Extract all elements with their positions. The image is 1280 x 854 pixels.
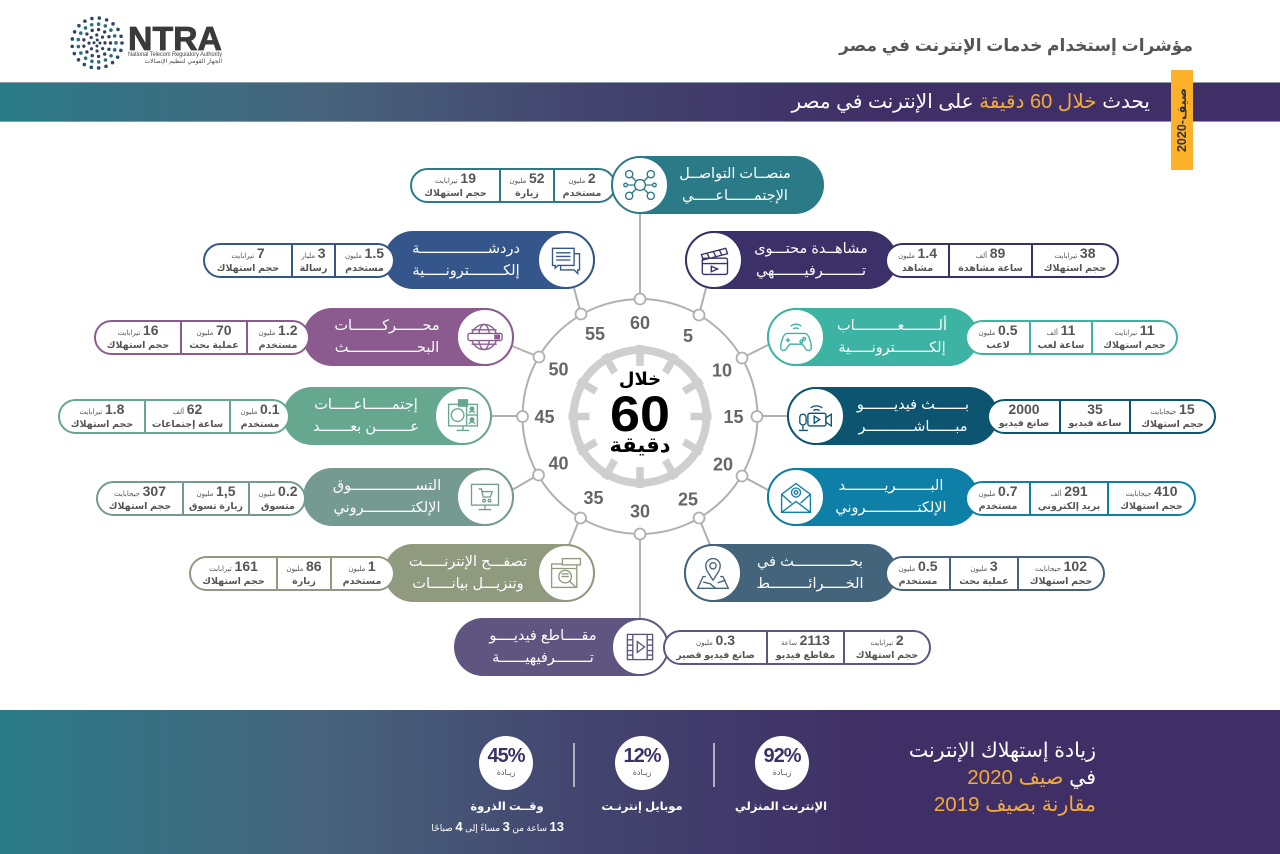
clock diagram: 30 xyxy=(630,502,650,522)
stats: ساعة مشاهدة xyxy=(958,263,1023,274)
stats: حجم استهلاك xyxy=(1030,576,1092,587)
stats: 11 تيرابايت xyxy=(1114,322,1155,338)
stats: زيارة xyxy=(515,188,539,199)
pill title xyxy=(754,241,868,279)
stats: 62 ألف xyxy=(173,401,202,417)
icon: map pin xyxy=(684,544,742,602)
pill title xyxy=(334,318,440,356)
clock diagram: 40 xyxy=(548,454,569,474)
clock diagram: 15 xyxy=(723,407,744,427)
pill title: البــــــــريـــــــــد xyxy=(839,478,943,494)
stats: 307 جيجابايت xyxy=(114,483,166,499)
stats xyxy=(965,320,1178,355)
clock diagram: 60 xyxy=(610,386,670,442)
logo: NTRA: الجهاز القومي لتنظيم الإتصالات xyxy=(145,58,222,65)
stats: زيارة تسوق xyxy=(189,501,243,512)
stats: 1 مليون xyxy=(348,558,376,574)
icon: clapperboard xyxy=(685,231,743,289)
stats xyxy=(94,320,310,355)
stats: 161 تيرابايت xyxy=(209,558,258,574)
pill title: مشاهــدة محتـــوى xyxy=(754,241,868,257)
stats: زيارة xyxy=(292,576,316,587)
stats: 2 تيرابايت xyxy=(870,632,904,648)
pill title: منصــات التواصــل xyxy=(679,166,791,182)
pill title: تصفـــح الإنترنـــــت xyxy=(409,554,527,570)
stat circle: peak time: زيـادة xyxy=(497,768,515,777)
stats: مشاهد xyxy=(902,263,933,274)
icon: game controller xyxy=(767,308,825,366)
panel: entertainment content xyxy=(685,231,1119,289)
stats: لاعب xyxy=(986,340,1010,351)
stats: حجم استهلاك xyxy=(217,263,279,274)
stats: 1.4 مليون xyxy=(898,245,937,261)
pill title: إجتمــــــاعـــــات xyxy=(314,397,418,413)
pill title: تــــــــرفيهيــــــة xyxy=(492,650,594,666)
stats xyxy=(96,481,306,516)
clock diagram: 60 xyxy=(630,313,650,333)
panel: e-commerce xyxy=(96,468,514,526)
stats: 19 تيرابايت xyxy=(435,170,476,186)
pill title: مقــــاطع فيديــــو xyxy=(489,628,597,644)
panel: email xyxy=(767,468,1196,526)
stats xyxy=(189,556,395,591)
pill title: بحـــــــــــــث في xyxy=(757,554,863,570)
pill title xyxy=(412,241,520,279)
icon: globe search xyxy=(456,308,514,366)
stats: حجم استهلاك xyxy=(1120,501,1183,512)
stats xyxy=(663,630,931,665)
stats: 38 تيرابايت xyxy=(1054,245,1096,261)
stats: مستخدم xyxy=(343,576,381,587)
season tag xyxy=(1171,70,1193,170)
icon: envelope xyxy=(767,468,825,526)
icon: network xyxy=(611,156,669,214)
stats xyxy=(203,243,395,278)
stats: حجم استهلاك xyxy=(202,576,265,587)
pill title xyxy=(856,397,969,435)
stat circle: mobile internet xyxy=(615,736,669,790)
panel: browsing and downloads xyxy=(189,544,595,602)
panel: search engines xyxy=(94,308,514,366)
clock diagram: خلال xyxy=(619,369,661,390)
stats: عملية بحث xyxy=(959,576,1009,587)
stats: متسوق xyxy=(261,501,295,512)
stats xyxy=(885,556,1105,591)
pill title: الإلكتـــــــــــروني xyxy=(334,500,440,516)
icon: chat bubbles xyxy=(537,231,595,289)
pill title xyxy=(313,397,419,435)
stat circle: home internet xyxy=(755,736,809,790)
label: peak time: وقــت الذروة xyxy=(470,801,544,813)
stats: حجم استهلاك xyxy=(1044,263,1106,274)
footer heading: زيادة إستهلاك الإنترنت xyxy=(909,739,1096,762)
stats: حجم استهلاك xyxy=(107,340,169,351)
stats: مستخدم xyxy=(899,576,937,587)
header band xyxy=(0,82,1280,122)
stats: 86 مليون xyxy=(286,558,322,574)
footer band xyxy=(0,710,1280,854)
stats: مستخدم xyxy=(241,419,279,430)
stats: ساعة لعب xyxy=(1038,340,1084,351)
clock diagram: 20 xyxy=(713,454,733,474)
panel: remote meetings xyxy=(58,387,492,445)
stats: حجم استهلاك xyxy=(424,188,487,199)
pill title: التســـــــــــــــوق xyxy=(333,478,441,494)
label: home internet: الإنترنت المنزلي xyxy=(735,801,827,813)
footer heading: في صيف 2020 xyxy=(967,766,1096,789)
pill title: الخـــــرائـــــــــط xyxy=(756,576,864,592)
stats: 3 مليون xyxy=(970,558,998,574)
pill title: دردشــــــــــــــــة xyxy=(412,241,520,257)
pill title xyxy=(679,166,791,204)
stats: ساعة إجتماعات xyxy=(152,419,223,430)
stats xyxy=(885,243,1119,278)
stat circle: peak time xyxy=(479,736,533,790)
icon: browser search xyxy=(537,544,595,602)
pill title: البحــــــــــــــــث xyxy=(335,340,439,356)
stats: عملية بحث xyxy=(189,340,239,351)
stats: مقاطع فيديو xyxy=(776,650,835,661)
stats: حجم استهلاك xyxy=(109,501,171,512)
stats xyxy=(410,168,616,203)
stats: 1.2 مليون xyxy=(258,322,298,338)
stats: 0.5 مليون xyxy=(898,558,938,574)
logo: NTRA xyxy=(70,16,222,70)
pill title xyxy=(837,316,947,356)
stats: 0.7 مليون xyxy=(978,483,1018,499)
pill title: الإجتمــــــاعـــــي xyxy=(682,188,788,204)
panel: live streaming xyxy=(787,387,1216,445)
stats: 35 xyxy=(1087,401,1103,417)
stats xyxy=(965,481,1196,516)
stat circle: home internet: 92% xyxy=(763,745,801,767)
clock diagram: 5 xyxy=(683,326,693,346)
stats: صانع فيديو قصير xyxy=(676,650,755,661)
pill title: عــــــــن بعـــــــد xyxy=(313,419,419,435)
stats: رسالة xyxy=(300,263,327,274)
stats: 0.1 مليون xyxy=(240,401,280,417)
icon: shopping screen xyxy=(456,468,514,526)
peak time note: 13 ساعة من 3 مساءً إلى 4 صباحًا xyxy=(431,819,564,834)
stat circle: mobile internet: 12% xyxy=(623,745,661,767)
pill title xyxy=(756,554,864,592)
stats: مستخدم xyxy=(979,501,1017,512)
title: مؤشرات إستخدام خدمات الإنترنت في مصر xyxy=(839,36,1193,55)
stat circle: home internet: زيـادة xyxy=(773,768,791,777)
panel: social platforms xyxy=(410,156,824,214)
stats: مستخدم xyxy=(563,188,601,199)
stats: 0.2 مليون xyxy=(258,483,298,499)
clock diagram: 45 xyxy=(534,407,555,427)
divider xyxy=(573,743,574,787)
stats: 70 مليون xyxy=(196,322,232,338)
stats: مستخدم xyxy=(345,263,384,274)
stat circle: peak time: 45% xyxy=(487,745,525,767)
panel: games xyxy=(767,308,1178,366)
clock diagram: 50 xyxy=(548,360,569,380)
stats: 291 ألف xyxy=(1050,483,1088,499)
stats: 1.8 تيرابايت xyxy=(80,401,124,417)
label: mobile internet: موبايل إنترنـت xyxy=(601,801,683,813)
icon: live camera xyxy=(787,387,845,445)
clock diagram: 35 xyxy=(583,488,604,508)
pill title xyxy=(333,478,441,516)
pill title: مبــــــاشـــــــــــر xyxy=(859,419,967,435)
logo: NTRA: NTRA xyxy=(128,20,222,57)
band heading: يحدث خلال 60 دقيقة على الإنترنت في مصر xyxy=(792,91,1150,113)
stats: 89 ألف xyxy=(976,245,1005,261)
pill title: إلكــــــــترونـــــية xyxy=(412,263,520,279)
stats: 410 جيجابايت xyxy=(1126,483,1178,499)
stats: حجم استهلاك xyxy=(1103,340,1166,351)
stats: 0.5 مليون xyxy=(978,322,1018,338)
stats: 52 مليون xyxy=(509,170,545,186)
stats xyxy=(58,399,290,434)
stats: حجم استهلاك xyxy=(71,419,133,430)
stats: 2 مليون xyxy=(568,170,596,186)
pill title xyxy=(835,478,947,516)
icon: film clip xyxy=(611,618,669,676)
stats: 15 جيجابايت xyxy=(1150,401,1195,417)
divider xyxy=(713,743,714,787)
stats: 2113 ساعة xyxy=(781,632,830,648)
stats: صانع فيديو xyxy=(999,418,1049,429)
pill title: إلكــــــــترونـــــية xyxy=(838,340,946,356)
stats: 7 تيرابايت xyxy=(231,245,265,261)
stats: 1,5 مليون xyxy=(196,483,236,499)
stats xyxy=(987,399,1216,434)
pill title xyxy=(488,628,597,666)
stats: ساعة فيديو xyxy=(1069,418,1121,429)
clock diagram: دقيقة xyxy=(610,433,671,457)
stats: 1.5 مليون xyxy=(345,245,384,261)
pill title: محــــــركـــــــات xyxy=(334,318,440,334)
pill title: ألــــــــعــــــــــاب xyxy=(837,318,947,334)
stats: مستخدم xyxy=(259,340,297,351)
panel: short video clips xyxy=(454,618,931,676)
stats: بريد إلكتروني xyxy=(1038,501,1100,512)
pill title: وتنزيـــل بيانـــــات xyxy=(412,576,524,592)
pill title xyxy=(409,554,527,592)
season tag text: صيف-2020 xyxy=(1175,88,1189,152)
stat circle: mobile internet: زيـادة xyxy=(633,768,651,777)
footer heading xyxy=(909,739,1096,816)
clock diagram: 25 xyxy=(678,490,698,510)
stats: حجم استهلاك xyxy=(1141,419,1204,430)
pill title: بـــــــث فيديـــــــو xyxy=(857,397,969,413)
stats: 16 تيرابايت xyxy=(118,322,158,338)
footer heading: مقارنة بصيف 2019 xyxy=(934,793,1096,816)
pill title: تـــــــــرفيـــــــهي xyxy=(756,263,866,279)
stats: 0.3 مليون xyxy=(696,632,735,648)
pill title: الإلكتــــــــــــروني xyxy=(835,500,947,516)
stats: حجم استهلاك xyxy=(856,650,918,661)
stats: 102 جيجابايت xyxy=(1035,558,1087,574)
panel: map search xyxy=(684,544,1105,602)
clock diagram: 10 xyxy=(712,360,732,380)
icon: video meeting xyxy=(434,387,492,445)
panel: chat xyxy=(203,231,595,289)
stats: 11 ألف xyxy=(1047,322,1075,338)
clock diagram: 55 xyxy=(585,324,605,344)
stats: 2000 xyxy=(1008,401,1040,417)
stats: 3 مليار xyxy=(301,245,326,261)
